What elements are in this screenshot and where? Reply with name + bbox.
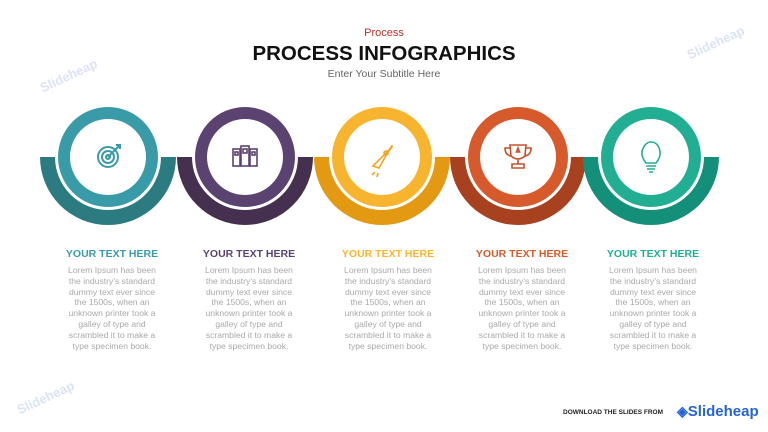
text: Lorem Ipsum has been bbox=[205, 265, 293, 275]
step 3 ring bbox=[314, 105, 450, 225]
step 4 text bbox=[476, 248, 568, 351]
text: the 1500s, when an bbox=[74, 297, 150, 307]
step 5 ring bbox=[583, 105, 719, 225]
text: Lorem Ipsum has been bbox=[344, 265, 432, 275]
text: unknown printer took a bbox=[479, 308, 565, 318]
text: galley of type and bbox=[619, 319, 687, 329]
text: galley of type and bbox=[354, 319, 422, 329]
text: the 1500s, when an bbox=[615, 297, 690, 307]
text: unknown printer took a bbox=[206, 308, 292, 318]
step 1 ring bbox=[40, 105, 176, 225]
footer download: DOWNLOAD THE SLIDES FROM bbox=[563, 409, 663, 416]
text: the 1500s, when an bbox=[350, 297, 426, 307]
text: the industry's standard bbox=[345, 276, 431, 286]
text: dummy text ever since bbox=[206, 287, 292, 297]
text: type specimen book. bbox=[210, 341, 288, 351]
text: galley of type and bbox=[78, 319, 146, 329]
text: YOUR TEXT HERE bbox=[203, 248, 295, 260]
text: scrambled it to make a bbox=[345, 330, 431, 340]
text: YOUR TEXT HERE bbox=[66, 248, 158, 260]
text: type specimen book. bbox=[483, 341, 561, 351]
watermarks: Slideheap bbox=[38, 56, 100, 95]
text: type specimen book. bbox=[349, 341, 427, 351]
text: dummy text ever since bbox=[610, 287, 696, 297]
text: scrambled it to make a bbox=[479, 330, 565, 340]
text: scrambled it to make a bbox=[69, 330, 155, 340]
text: YOUR TEXT HERE bbox=[476, 248, 568, 260]
text: type specimen book. bbox=[614, 341, 692, 351]
text: YOUR TEXT HERE bbox=[607, 248, 699, 260]
text: dummy text ever since bbox=[345, 287, 431, 297]
text: the 1500s, when an bbox=[484, 297, 560, 307]
text: scrambled it to make a bbox=[206, 330, 292, 340]
text: type specimen book. bbox=[73, 341, 151, 351]
step 4 ring bbox=[450, 105, 586, 225]
text: Slideheap bbox=[685, 23, 747, 62]
text: Lorem Ipsum has been bbox=[478, 265, 566, 275]
step 3 text bbox=[342, 248, 434, 351]
text: the industry's standard bbox=[610, 276, 696, 286]
text: YOUR TEXT HERE bbox=[342, 248, 434, 260]
text: scrambled it to make a bbox=[610, 330, 696, 340]
text: galley of type and bbox=[488, 319, 556, 329]
text: unknown printer took a bbox=[69, 308, 155, 318]
text: the industry's standard bbox=[479, 276, 565, 286]
process chart bbox=[40, 107, 719, 225]
label: Process: Process bbox=[364, 27, 404, 39]
text: unknown printer took a bbox=[345, 308, 431, 318]
text: the 1500s, when an bbox=[211, 297, 286, 307]
text: the industry's standard bbox=[206, 276, 292, 286]
text: Lorem Ipsum has been bbox=[68, 265, 156, 275]
title: PROCESS INFOGRAPHICS bbox=[252, 42, 516, 65]
text: Lorem Ipsum has been bbox=[609, 265, 697, 275]
text: Slideheap bbox=[15, 378, 77, 417]
text: unknown printer took a bbox=[610, 308, 696, 318]
step 1 text bbox=[66, 248, 158, 351]
text: the industry's standard bbox=[69, 276, 155, 286]
text: dummy text ever since bbox=[479, 287, 565, 297]
text: dummy text ever since bbox=[69, 287, 155, 297]
footer logo: ◈Slideheap bbox=[677, 403, 759, 420]
step 2 text bbox=[203, 248, 295, 351]
step 2 ring bbox=[177, 105, 313, 225]
step 5 text bbox=[607, 248, 699, 351]
subtitle: Enter Your Subtitle Here bbox=[328, 68, 440, 80]
text: galley of type and bbox=[215, 319, 283, 329]
